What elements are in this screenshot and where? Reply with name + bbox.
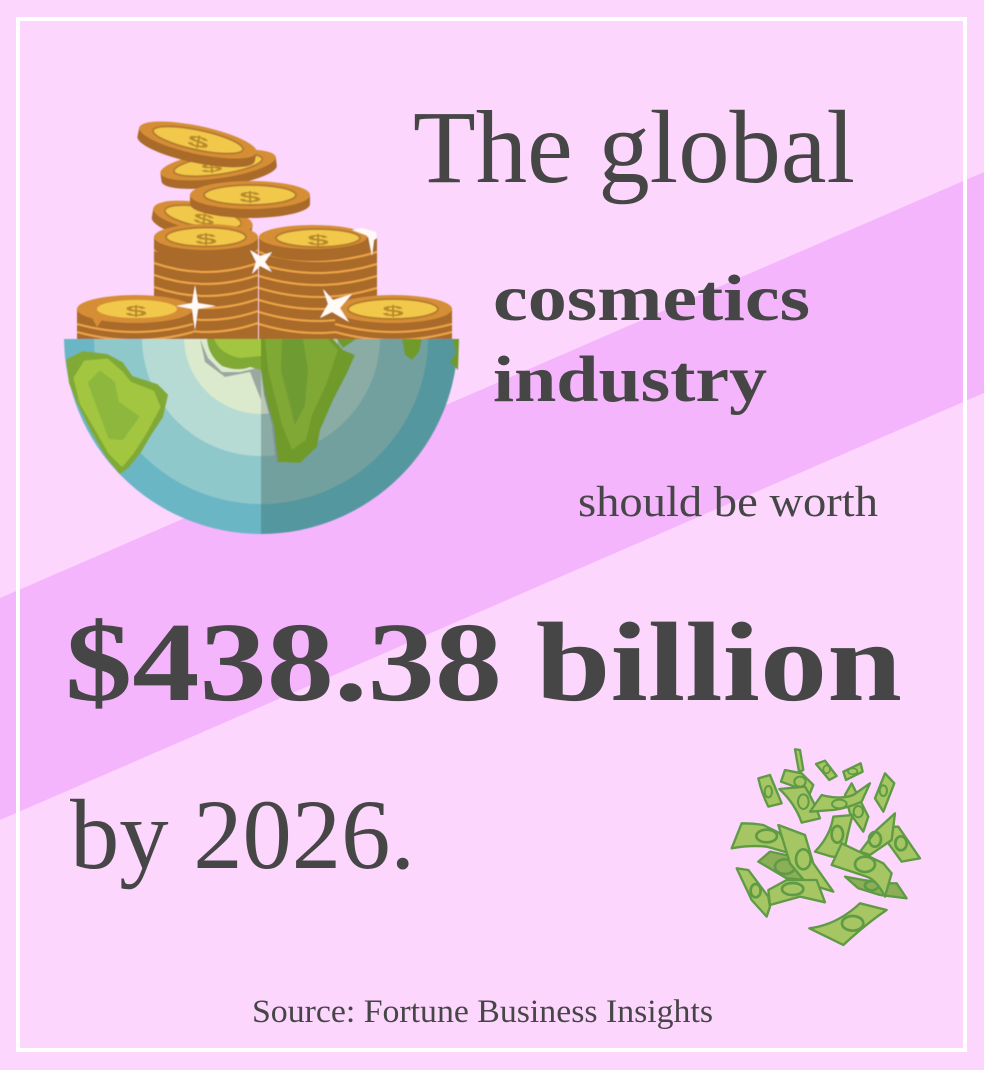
text: by 2026.: by 2026. bbox=[70, 779, 415, 890]
coin: back tilted: $ bbox=[192, 210, 216, 229]
coin: second tilted bbox=[160, 149, 278, 190]
coin: top tilted: $ bbox=[186, 131, 211, 153]
coin: back tilted bbox=[151, 200, 254, 232]
stack: small left: $ bbox=[125, 303, 147, 319]
coin stacks bbox=[77, 114, 452, 345]
icon: flying money bbox=[732, 749, 920, 945]
coin: top tilted bbox=[136, 120, 257, 168]
stack: small right: $ bbox=[382, 303, 404, 319]
stack: left: $ bbox=[195, 231, 217, 247]
coin: floating: $ bbox=[239, 189, 261, 205]
stack: right: $ bbox=[307, 232, 329, 248]
source: Source: Fortune Business Insights bbox=[252, 994, 713, 1030]
stack: left bbox=[154, 224, 258, 345]
coin: second tilted: $ bbox=[200, 160, 223, 176]
diagonal band bbox=[0, 172, 984, 820]
stack: right bbox=[259, 225, 377, 345]
stack: small right bbox=[334, 295, 452, 345]
globe bbox=[63, 338, 460, 535]
heading: cosmetics: cosmetics bbox=[493, 262, 810, 335]
sparkles bbox=[176, 228, 377, 330]
text: should be worth: should be worth bbox=[578, 479, 878, 526]
title: The global: The global bbox=[413, 90, 855, 205]
continent: South America bbox=[67, 352, 167, 473]
stack: small left bbox=[77, 295, 193, 345]
heading: industry: industry bbox=[493, 343, 767, 416]
coin: floating bbox=[190, 181, 310, 218]
icon: coins on globe bbox=[64, 114, 459, 534]
big number: $438.38 billion: $438.38 billion bbox=[65, 600, 902, 725]
